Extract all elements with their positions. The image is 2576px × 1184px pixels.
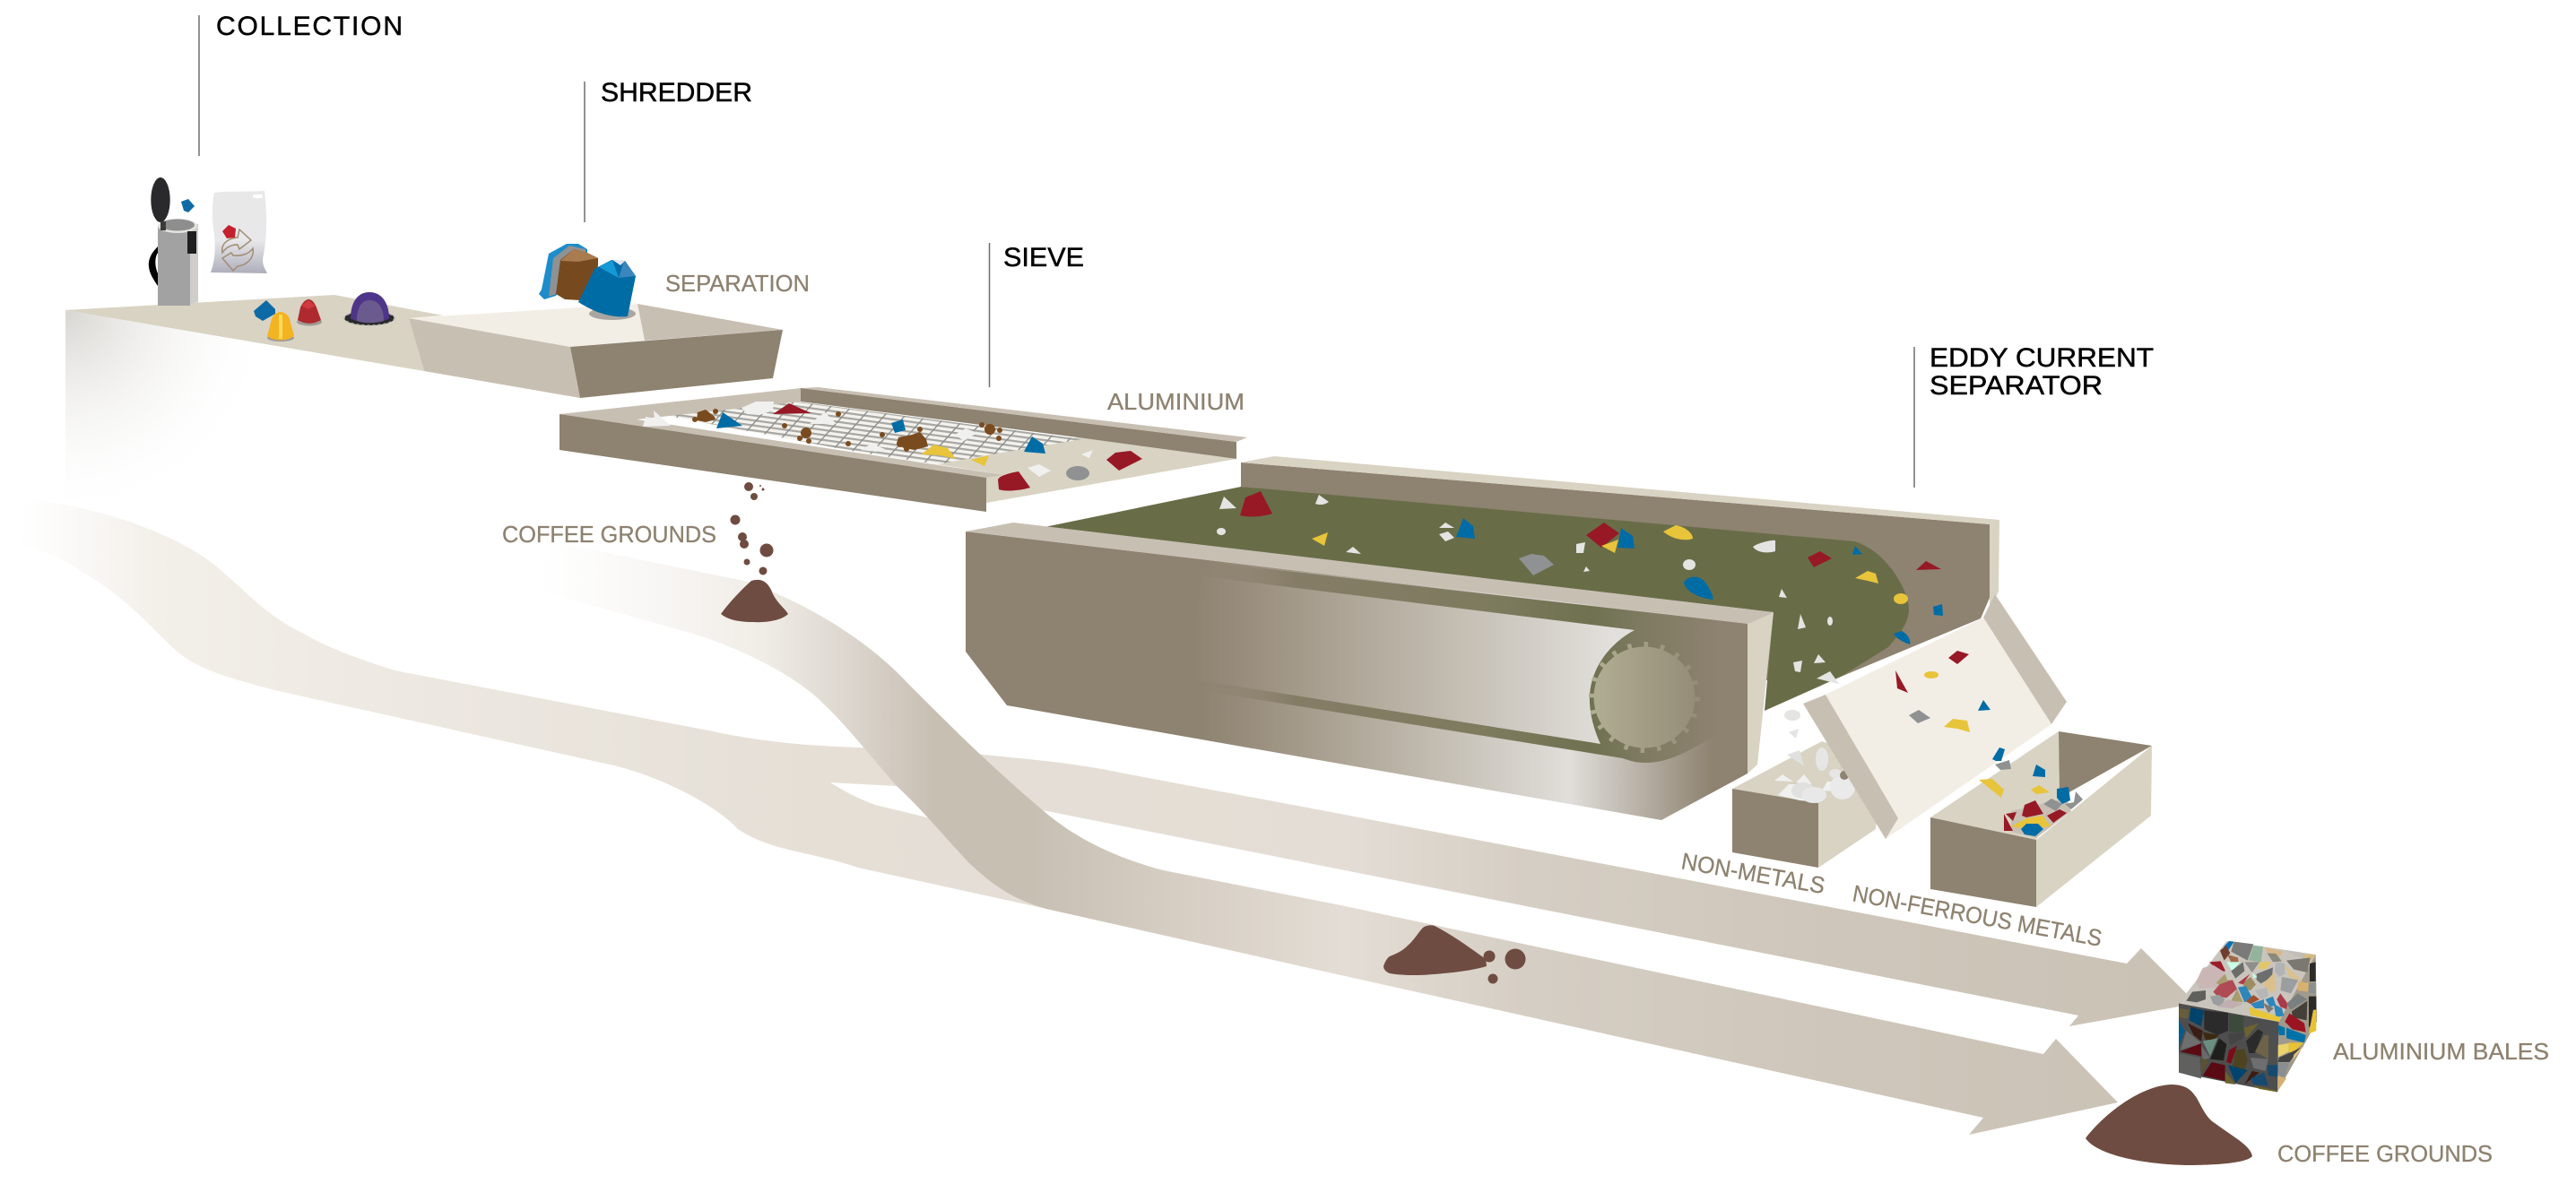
icon: falling blue capsule xyxy=(181,199,195,212)
icon: red capsule xyxy=(297,299,322,326)
panel: sieve tray xyxy=(559,385,1247,512)
icon: falling coffee grounds xyxy=(730,482,773,575)
panel: collection table xyxy=(65,295,443,538)
panel: eddy current back wall xyxy=(1241,456,1999,681)
icon: collection bin xyxy=(149,177,198,306)
heading: eddy current separator xyxy=(1930,343,2154,401)
sieve fragments xyxy=(643,402,1142,490)
heading: shredder: SHREDDER xyxy=(601,78,752,108)
panel: eddy current front housing xyxy=(966,523,1774,820)
label: coffee grounds output: COFFEE GROUNDS xyxy=(2277,1140,2493,1167)
heading: eddy current separator: SEPARATOR xyxy=(1930,371,2103,401)
flow ribbon: main material stream xyxy=(22,497,2188,1135)
icon: middle coffee mound xyxy=(1383,925,1526,984)
heading: eddy current separator: EDDY CURRENT xyxy=(1930,343,2154,373)
icon: purple capsule xyxy=(344,292,395,325)
icon: shredder capsules xyxy=(539,244,636,320)
label: coffee grounds at sieve: COFFEE GROUNDS xyxy=(502,521,716,548)
heading: collection: COLLECTION xyxy=(216,12,403,41)
belt fragments xyxy=(1217,491,1943,684)
icon: small coffee mound xyxy=(721,580,788,622)
callout line: collection xyxy=(198,15,200,156)
icon: yellow capsule xyxy=(267,312,294,341)
panel: chute xyxy=(1803,594,2067,839)
panel: non-ferrous box xyxy=(1930,731,2152,907)
conveyor belt xyxy=(1045,487,1909,711)
icon: aluminium bale xyxy=(2179,941,2317,1092)
panel: non-metals box xyxy=(1732,741,1883,868)
heading: sieve: SIEVE xyxy=(1003,243,1084,272)
flow ribbon: coffee grounds stream xyxy=(541,542,1345,976)
chute and falling fragments xyxy=(1895,651,2050,798)
icon: recycling bag xyxy=(211,191,267,273)
panel: shredder box xyxy=(409,304,783,398)
callout line: eddy current separator xyxy=(1913,347,1915,488)
callout line: shredder xyxy=(584,82,585,222)
label: separation: SEPARATION xyxy=(665,270,810,297)
label: non-ferrous metals: NON-FERROUS METALS xyxy=(1851,879,2104,952)
falling non-metal pieces xyxy=(1784,710,1800,739)
icon: blue capsule on table xyxy=(254,300,275,321)
label: non-metals: NON-METALS xyxy=(1679,847,1827,899)
callout line: sieve xyxy=(988,243,990,387)
label: aluminium: ALUMINIUM xyxy=(1107,388,1245,415)
label: aluminium bales: ALUMINIUM BALES xyxy=(2333,1038,2549,1065)
icon: big coffee mound xyxy=(2086,1085,2252,1165)
